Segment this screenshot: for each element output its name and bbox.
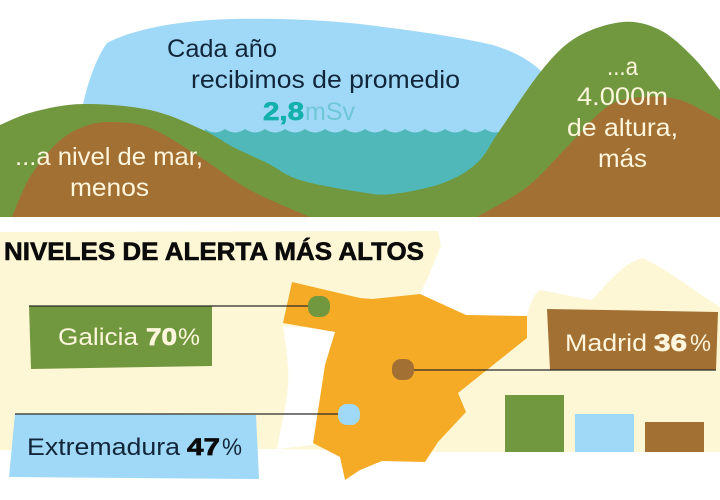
text: Cada año recibimos de promedio: recibimos de promedio [191,66,460,94]
callout: Galicia [29,296,330,369]
text: a 4.000m de altura, más: de altura, [567,114,678,142]
callout: Extremadura [9,404,360,479]
text: 2,8 mSv: mSv [305,98,356,126]
text: 2,8 mSv: 2,8 [263,98,304,126]
text: a 4.000m de altura, más: 4.000m [577,83,668,111]
text: a 4.000m de altura, más: más [598,145,647,173]
callout: Madrid: % [690,330,711,357]
bar chart [505,395,704,452]
callout: Madrid: Madrid [565,330,647,357]
sky shape [83,19,543,135]
callout: Galicia: % [178,324,200,351]
callout: Extremadura: 47 [187,434,220,461]
heading: NIVELES DE ALERTA MÁS ALTOS [4,237,424,266]
text: a 4.000m de altura, más: ...a [607,53,638,81]
panel: landscape [0,19,720,217]
text: 2,8 mSv [263,98,356,126]
water [205,129,505,200]
callout: Galicia: Galicia [58,324,139,351]
panel: alert levels [0,231,720,480]
callout: Madrid [392,309,718,380]
text: a nivel de mar, menos: menos [70,174,149,202]
callout: Galicia: 70 [146,324,177,351]
callout: Extremadura: % [222,434,242,461]
text: a 4.000m de altura, más [567,53,678,173]
map of Spain [283,282,527,480]
text: a nivel de mar, menos [15,143,203,202]
text: Cada año recibimos de promedio [167,35,460,94]
text: a nivel de mar, menos: ...a nivel de mar, [15,143,203,171]
callout: Extremadura: Extremadura [27,434,181,461]
callout: Madrid: 36 [654,330,687,357]
white area: Portugal [277,326,337,449]
text: Cada año recibimos de promedio: Cada año [167,35,277,63]
brown hills [12,122,310,217]
cream background [0,231,720,452]
green hills [0,22,720,217]
